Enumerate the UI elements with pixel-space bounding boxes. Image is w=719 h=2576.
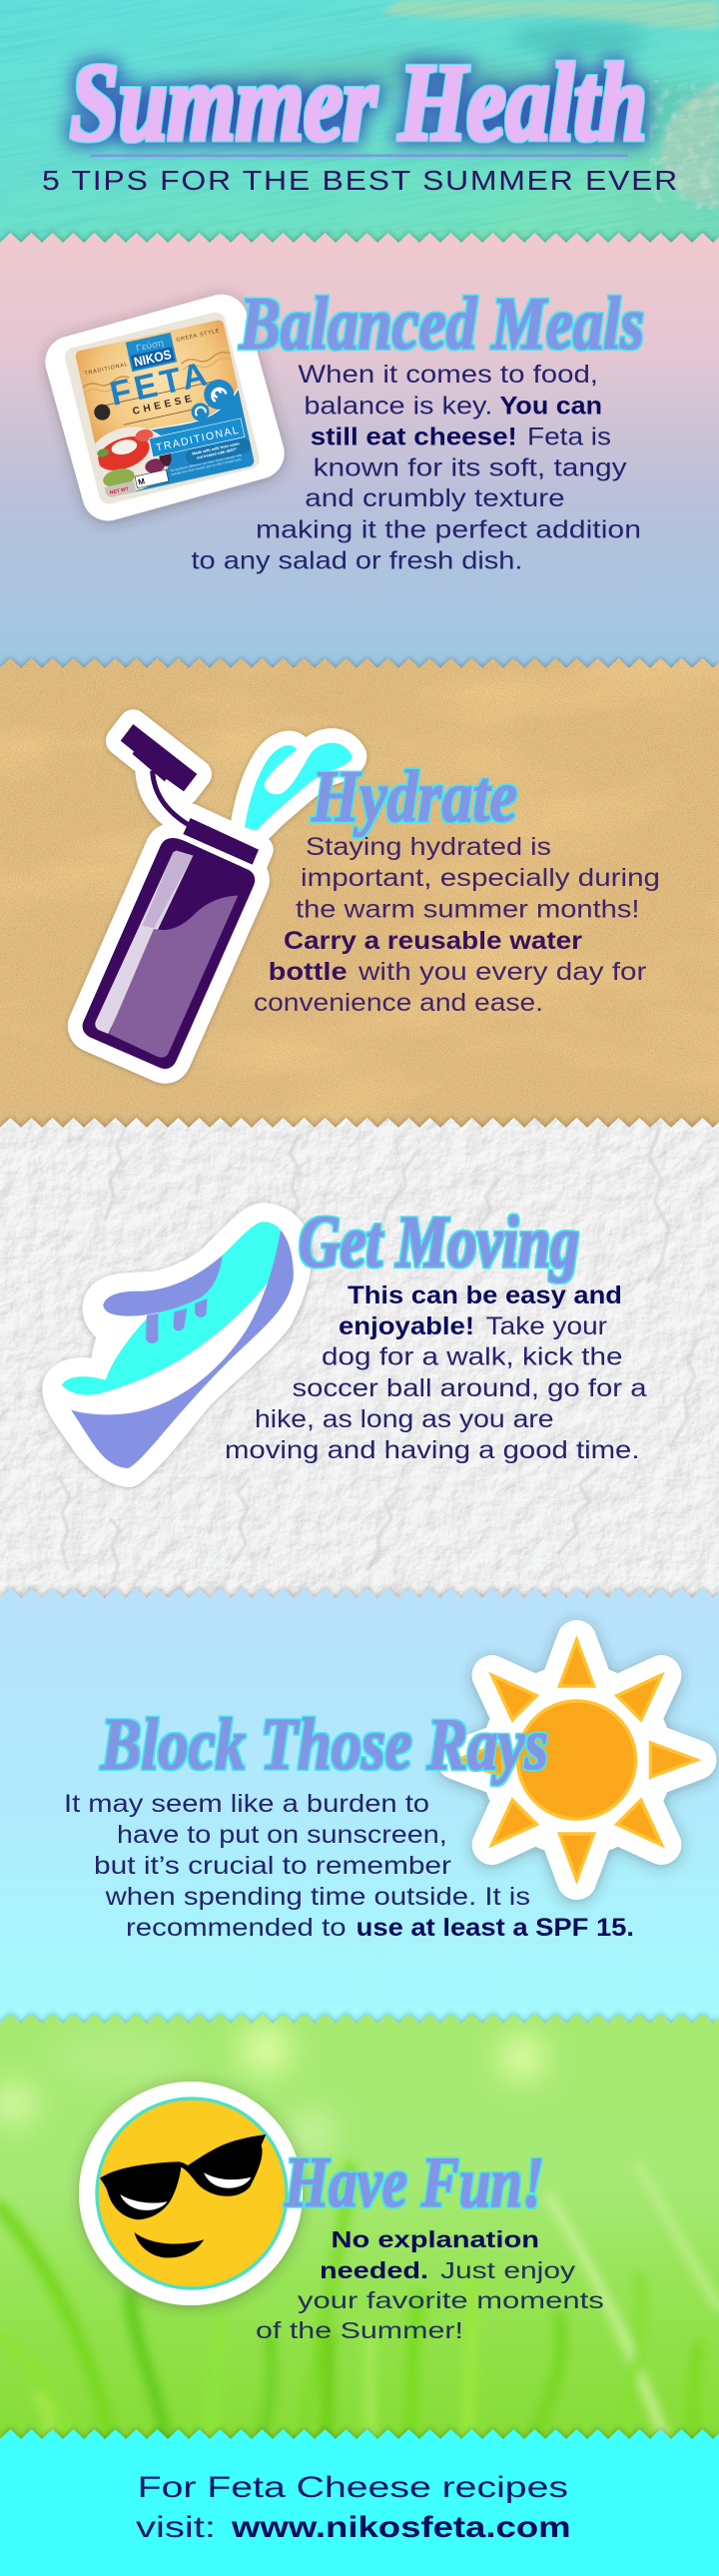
text block: footer call to action: visit:	[136, 2511, 216, 2544]
divider line	[91, 154, 628, 157]
text block: balanced meals copy: balance is key.	[304, 393, 492, 421]
text block: sunscreen copy	[64, 1790, 634, 1942]
panel: hydrate	[0, 658, 719, 1128]
heading: block those rays: Block Those Rays	[100, 1704, 548, 1786]
text block: balanced meals copy: making it the perfect addition	[256, 516, 641, 544]
text block: get moving copy: moving and having a good time.	[225, 1436, 639, 1464]
icon: sunglasses smiley sticker	[79, 2082, 303, 2305]
icon: feta cheese package sticker: M	[137, 476, 146, 486]
heading: have fun: Have Fun!	[284, 2143, 544, 2222]
icon: running shoe sticker	[61, 1222, 294, 1468]
text block: footer call to action: www.nikosfeta.com	[231, 2511, 571, 2544]
text block: hydrate copy	[254, 833, 660, 1017]
panel: get moving	[0, 1118, 719, 1602]
text block: sunscreen copy: use at least a SPF 15.	[357, 1914, 634, 1942]
text block: balanced meals copy	[192, 361, 641, 574]
text block: hydrate copy: with you every day for	[358, 958, 646, 986]
icon: feta cheese package sticker: Made with milk from cows	[192, 440, 240, 456]
icon: feta cheese package sticker: TRADITIONAL	[84, 362, 128, 378]
text block: hydrate copy: bottle	[269, 958, 348, 986]
text block: hydrate copy: important, especially during	[301, 864, 660, 892]
text block: get moving copy: This can be easy and	[348, 1282, 622, 1309]
icon: feta cheese package sticker: TRADITIONAL	[155, 425, 240, 454]
icon: feta cheese package sticker: Γεύση	[135, 338, 165, 354]
heading: get moving: Get Moving	[299, 1202, 579, 1284]
panel: header with ocean background	[0, 0, 719, 243]
text block: have fun copy: needed.	[320, 2257, 428, 2283]
text block: have fun copy: your favorite moments	[298, 2287, 604, 2313]
panel: have fun	[0, 2014, 719, 2443]
icon: sun sticker	[457, 1640, 697, 1880]
text block: hydrate copy: the warm summer months!	[296, 896, 639, 924]
text block: balanced meals copy: known for its soft, tangy	[314, 453, 627, 481]
icon: feta cheese package sticker: not treated with rBST*	[196, 446, 238, 460]
icon: feta cheese package sticker	[39, 289, 291, 526]
icon: feta cheese package sticker: NIKOS	[133, 347, 173, 370]
panel: footer	[0, 2429, 719, 2576]
text block: balanced meals copy: You can	[499, 393, 602, 421]
text block: hydrate copy: Staying hydrated is	[306, 833, 551, 861]
text block: hydrate copy: Carry a reusable water	[284, 927, 582, 955]
icon: feta cheese package sticker: GREEK STYLE	[176, 328, 221, 344]
text block: have fun copy	[256, 2226, 604, 2343]
text block: get moving copy: Take your	[486, 1312, 607, 1340]
text block: balanced meals copy: Feta is	[527, 424, 611, 451]
text block: footer call to action: For Feta Cheese recipes	[138, 2471, 568, 2504]
text block: footer call to action	[136, 2471, 571, 2544]
text block: have fun copy: of the Summer!	[256, 2317, 463, 2343]
icon: feta cheese package sticker: derived from rBST-treated and non rBST-treated cows	[171, 457, 242, 476]
icon: feta cheese package sticker: NET WT	[109, 486, 129, 496]
panel: balanced meals	[0, 233, 719, 672]
text block: balanced meals copy: When it comes to food,	[298, 361, 598, 389]
text block: get moving copy: soccer ball around, go for a	[292, 1374, 647, 1402]
text block: get moving copy: dog for a walk, kick the	[322, 1343, 623, 1371]
icon: feta cheese package sticker: FETA	[107, 356, 211, 414]
text block: get moving copy	[225, 1282, 647, 1464]
text block: sunscreen copy: It may seem like a burden to	[64, 1790, 429, 1818]
heading: hydrate: Hydrate	[311, 756, 517, 838]
text block: balanced meals copy: to any salad or fresh dish.	[192, 546, 523, 574]
icon: feta cheese package sticker: No significant difference has been shown between milk	[170, 452, 243, 472]
icon: water bottle sticker	[83, 724, 353, 1069]
subtitle: 5 TIPS FOR THE BEST SUMMER EVER	[42, 165, 679, 196]
text block: have fun copy: No explanation	[332, 2226, 539, 2252]
text block: have fun copy: Just enjoy	[440, 2257, 576, 2283]
text block: balanced meals copy: still eat cheese!	[311, 424, 517, 451]
text block: sunscreen copy: but it’s crucial to remember	[94, 1852, 451, 1880]
text block: sunscreen copy: recommended to	[126, 1914, 347, 1942]
text block: sunscreen copy: have to put on sunscreen,	[117, 1821, 447, 1849]
text block: get moving copy: hike, as long as you are	[255, 1405, 554, 1433]
text block: hydrate copy: convenience and ease.	[254, 989, 543, 1017]
text block: sunscreen copy: when spending time outside. It is	[104, 1883, 530, 1911]
text block: balanced meals copy: and crumbly texture	[305, 484, 565, 512]
text block: get moving copy: enjoyable!	[339, 1312, 474, 1340]
icon: feta cheese package sticker: CHEESE	[132, 394, 193, 418]
panel: block those rays	[0, 1588, 719, 2028]
